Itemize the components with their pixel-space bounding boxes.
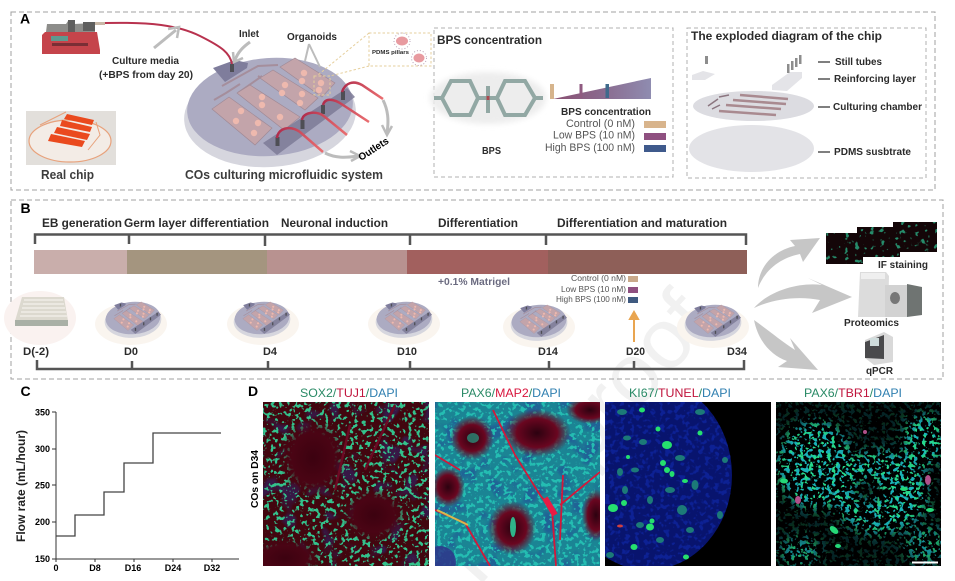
syringe pump [42,20,105,54]
small legend [556,274,638,304]
x tick labels: D16 [125,563,141,573]
y tick labels: 350 [35,408,50,418]
A text labels: COs culturing microfluidic system [185,168,383,182]
scale bar [912,562,938,564]
label B: B [20,200,31,216]
real chip photo [26,111,116,165]
qPCR instrument [865,332,893,365]
day labels: D34 [727,346,748,358]
outlet tubes [277,83,383,152]
layer labels: Still tubes [835,57,882,68]
IF staining images [826,222,937,264]
stage bracket [35,234,746,246]
A text labels: Culture media [112,56,179,67]
arrow to proteomics [754,278,852,313]
small legend: Control (0 nM) [571,274,626,283]
inset PDMS pillars: PDMS pillars [372,50,409,56]
stage headings: EB generation [42,216,122,230]
BPS label: BPS [482,146,501,157]
small legend: Low BPS (10 nM) [561,285,626,294]
layer labels [818,57,922,158]
pointer arrows [154,27,392,161]
concentration legend: BPS concentration [561,106,651,118]
stage headings: Germ layer differentiation [124,216,269,230]
x tick labels: 0 [53,563,59,573]
y tick labels: 150 [35,554,50,564]
micrograph PAX6 TBR1 [776,402,941,566]
axes [52,412,239,562]
micrograph KI67 TUNEL [605,402,771,566]
proteomics label: Proteomics [844,318,899,329]
A text labels: Organoids [287,31,337,43]
qPCR label: qPCR [866,366,894,377]
exploded diagram box [687,28,926,178]
heading KI67: KI67/TUNEL/DAPI [629,386,731,400]
day labels: D10 [397,346,417,358]
y tick labels: 250 [35,480,50,490]
A text labels: Outlets [357,136,392,164]
arrow to IF staining [758,238,820,288]
concentration legend: Low BPS (10 nM) [553,130,635,142]
arrow to qPCR [754,320,818,370]
small legend: High BPS (100 nM) [556,295,626,304]
micrograph SOX2 TUJ1 [263,402,429,566]
y axis title: Flow rate (mL/hour) [14,430,28,542]
inset PDMS pillars [314,33,431,95]
IF staining label: IF staining [878,259,928,271]
stage headings: Neuronal induction [281,216,388,230]
concentration gradient [550,78,651,99]
panel A [11,10,935,190]
chip D14 [503,303,575,348]
day labels: D0 [124,346,138,358]
inlet tube [105,23,232,64]
BPS concentration box [430,28,673,177]
exploded diagram title: The exploded diagram of the chip [691,29,882,43]
label D: D [248,383,258,399]
main chip illustration [181,52,359,173]
A text labels: Real chip [41,168,94,182]
y tick labels [35,408,50,564]
A text labels [41,29,392,182]
x tick labels: D8 [89,563,101,573]
layer labels: Reinforcing layer [834,74,916,85]
proteomics instrument [858,272,922,317]
chip D34 [677,303,749,348]
layer labels: PDMS susbtrate [834,147,911,158]
step line [56,433,221,536]
stage colour bar [34,250,747,274]
timeline [37,360,744,369]
y tick labels: 300 [35,444,50,454]
chip layers [689,55,814,172]
day labels: D(-2) [23,346,49,358]
x tick labels: D24 [165,563,181,573]
stage headings [42,216,727,230]
micrograph PAX6 MAP2 [435,402,600,566]
label A: A [20,10,30,26]
concentration legend [545,106,666,154]
BPS box title: BPS concentration [437,33,542,47]
x tick labels [53,563,220,573]
chip D0 [95,300,167,345]
day labels [23,346,748,358]
A text labels: Inlet [239,29,260,40]
day labels: D14 [538,346,559,358]
row label: COs on D34 [249,450,261,508]
stage headings: Differentiation [438,216,518,230]
well plate D(-2) [4,291,76,345]
heading PAX6 MAP2: PAX6/MAP2/DAPI [461,386,561,400]
heading SOX2: SOX2/TUJ1/DAPI [300,386,398,400]
concentration legend: High BPS (100 nM) [545,142,635,154]
chip D4 [227,300,299,345]
panel B [4,200,943,379]
stage headings: Differentiation and maturation [557,216,727,230]
concentration legend: Control (0 nM) [566,118,635,130]
Matrigel note: +0.1% Matrigel [438,277,510,288]
label C: C [20,383,31,399]
layer labels: Culturing chamber [833,102,922,113]
panel D [248,380,941,578]
y tick labels: 200 [35,517,50,527]
x tick labels: D32 [204,563,220,573]
day labels: D20 [626,346,645,358]
panel C flow rate chart [14,383,239,573]
heading PAX6 TBR1: PAX6/TBR1/DAPI [804,386,902,400]
day labels: D4 [263,346,278,358]
A text labels: (+BPS from day 20) [99,70,193,81]
BPS molecule [430,72,546,124]
chip D10 [368,300,440,345]
orange arrow D20 [630,312,638,342]
